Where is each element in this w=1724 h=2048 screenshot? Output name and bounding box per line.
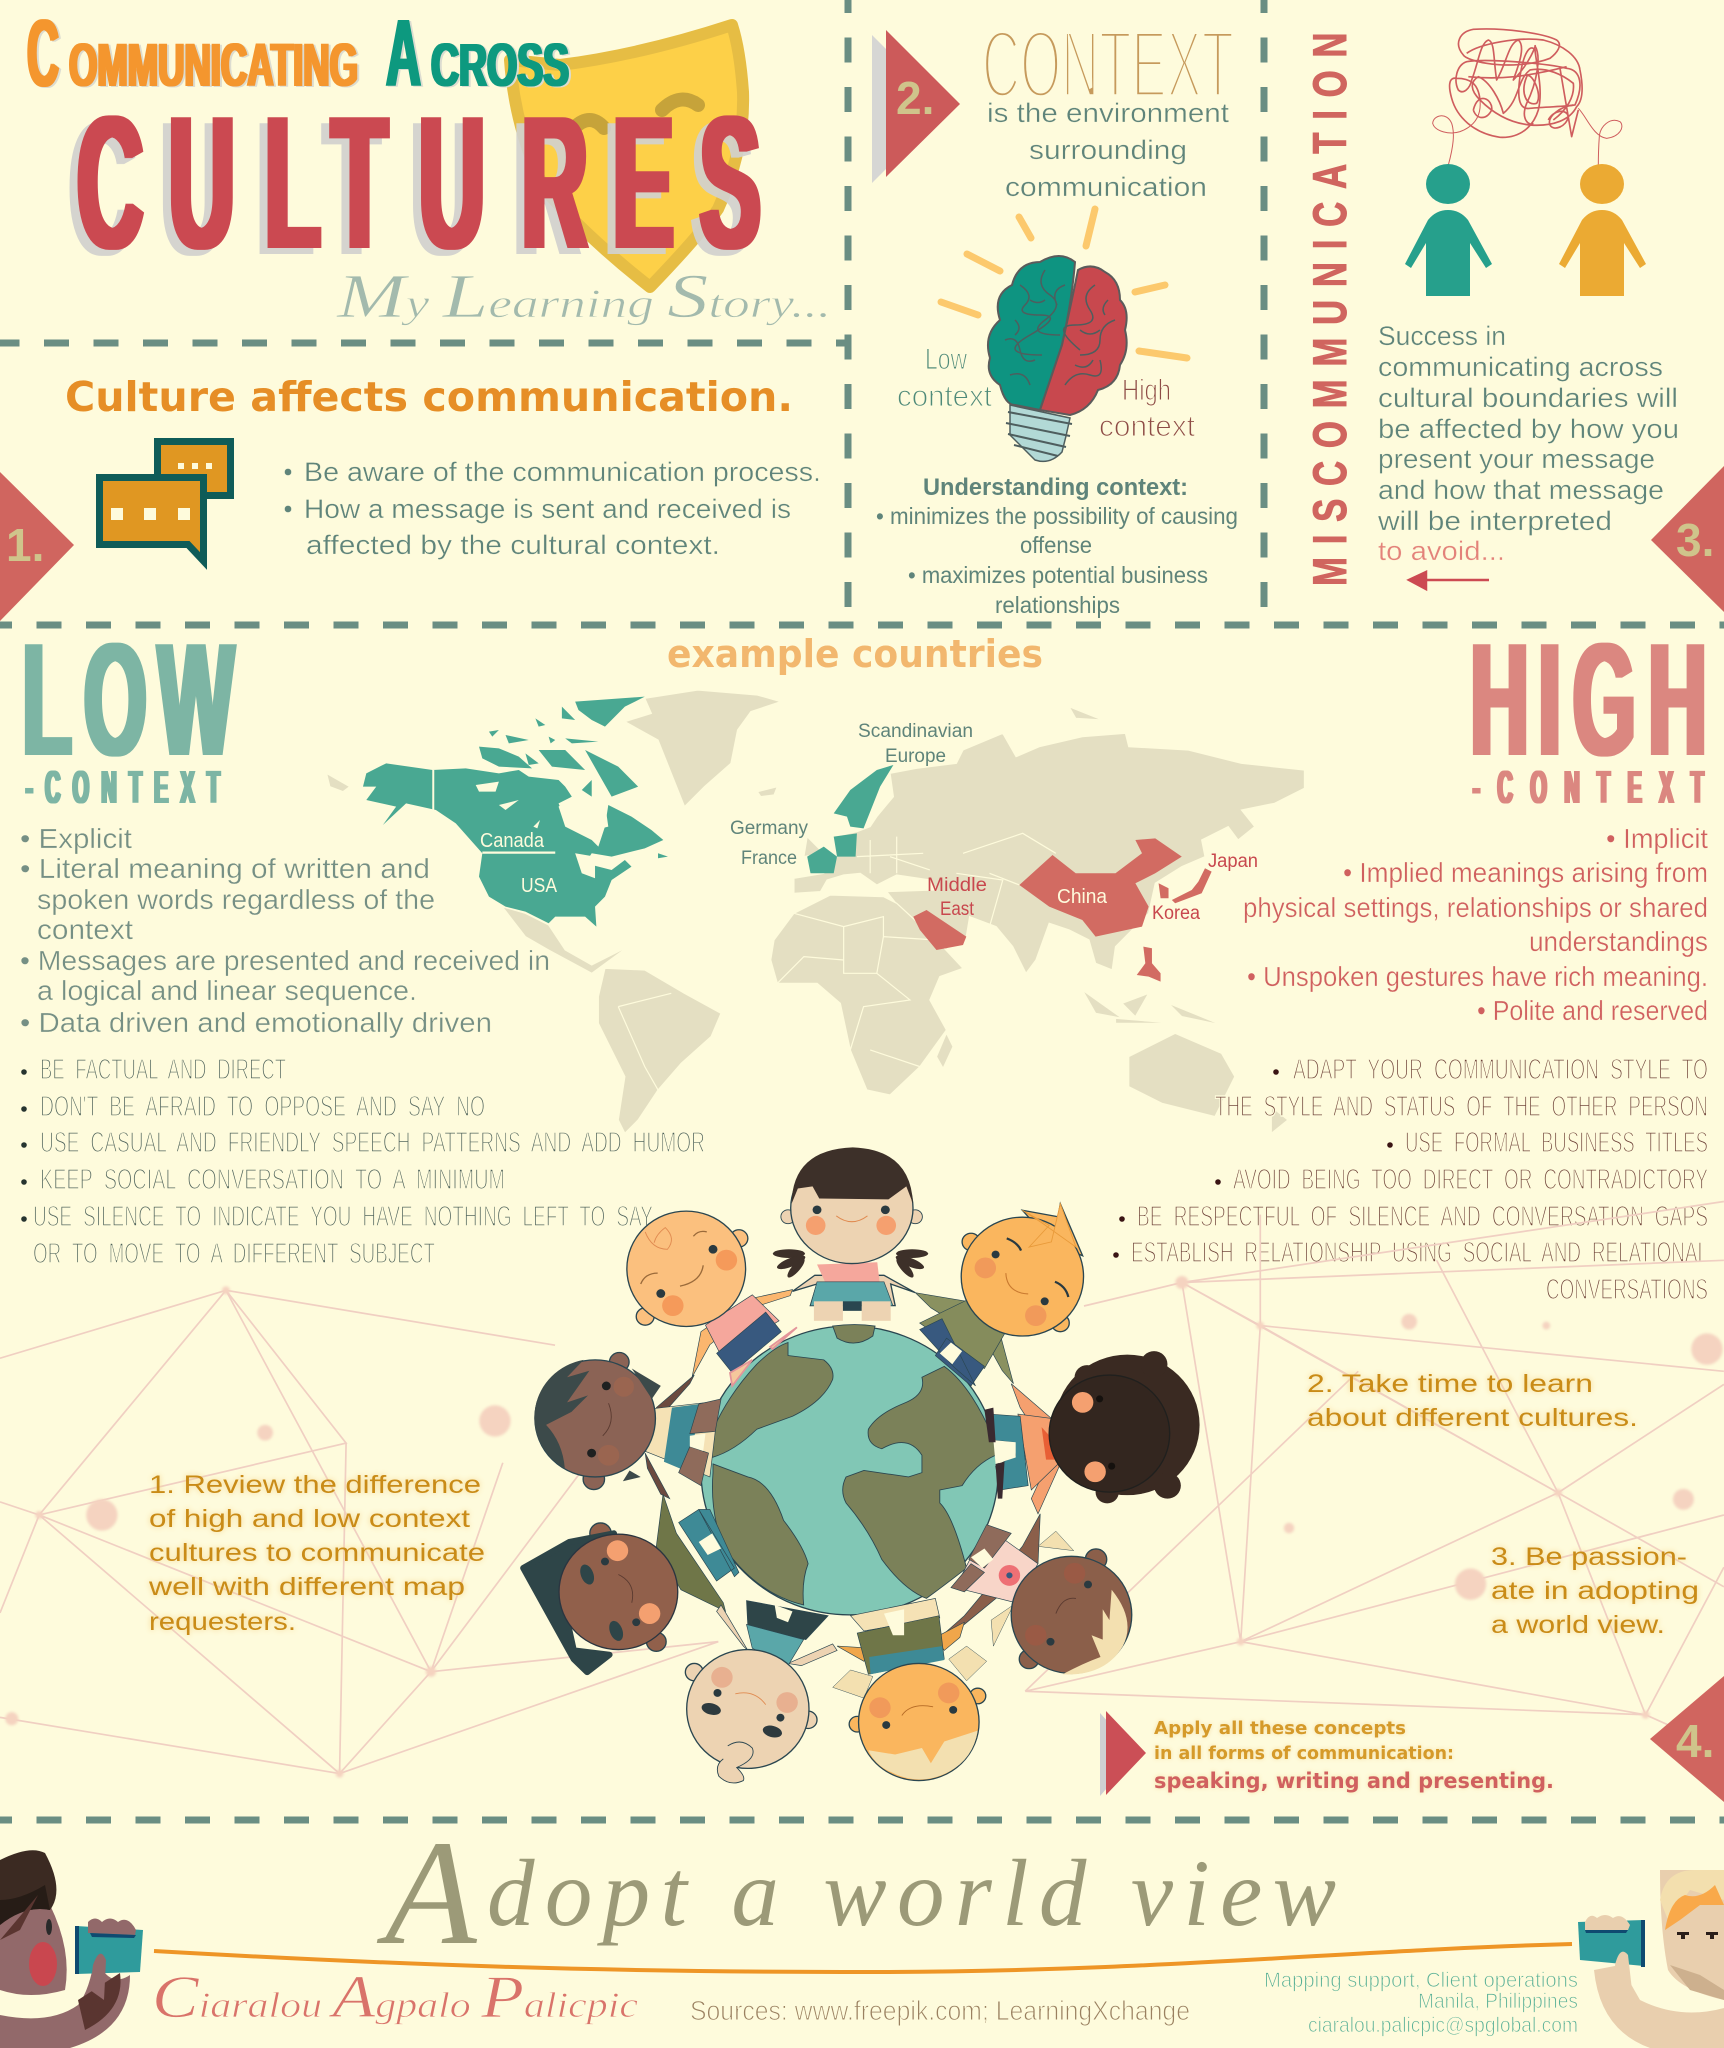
title: Cultures: CULTURES: [77, 76, 761, 289]
title: Communicating Across: A: [386, 0, 421, 107]
heading: Culture affects communication: Culture affects communication.: [65, 373, 793, 421]
text block: low context advice: KEEP SOCIAL CONVERSATION TO A MINIMUM: [40, 1164, 505, 1196]
arrow: pointing left: [1409, 572, 1489, 589]
text block: high context traits: [1243, 823, 1708, 1026]
text block: success across boundaries: be affected by how you: [1378, 414, 1679, 444]
text block: communication process bullets: Be aware of the communication process.: [304, 457, 821, 487]
text block: low context traits: • Data driven and emotionally driven: [20, 1007, 492, 1038]
text block: low context advice: OR TO MOVE TO A DIFFERENT SUBJECT: [33, 1238, 435, 1270]
icon: yellow person: [1559, 164, 1646, 296]
heading: Adopt a world view: dopt a world view: [487, 1840, 1336, 1946]
icon: chat bubbles: [100, 442, 230, 561]
text block: success across boundaries: Success in: [1378, 321, 1506, 351]
labels: map countries: East: [940, 899, 975, 920]
text block: step 1 review: of high and low context: [149, 1505, 470, 1533]
text block: low context traits: [20, 823, 550, 1038]
child: upper-left: [627, 1211, 797, 1386]
text block: low context traits: spoken words regardless of the: [37, 884, 435, 915]
heading: High context: -CONTEXT: [1473, 762, 1704, 813]
illustration: left person with can: [0, 1850, 143, 2048]
callout: apply all these concepts: speaking, writing and presenting.: [1154, 1769, 1554, 1793]
text: sources: Sources: www.freepik.com; LearningXchange: [690, 1995, 1190, 2026]
marker: number 2: 2.: [896, 72, 934, 124]
text block: low context traits: a logical and linear sequence.: [37, 975, 417, 1006]
world map: [327, 690, 1304, 1133]
callout: apply all these concepts: [1154, 1718, 1554, 1793]
text block: context definition: [987, 98, 1230, 202]
text block: contact details: Mapping support, Client operations: [1264, 1969, 1578, 1992]
labels: map countries: USA: [521, 875, 558, 897]
signature: author name: Ciaralou Agpalo Palicpic: [152, 1964, 638, 2030]
text block: step 2 learn: 2. Take time to learn: [1307, 1370, 1593, 1398]
text block: step 2 learn: [1307, 1370, 1638, 1432]
marker: number 2: [872, 30, 960, 183]
text block: low context advice: [21, 1054, 705, 1270]
labels: low and high context: context: [897, 380, 993, 413]
text block: low context traits: • Messages are presented and received in: [20, 945, 550, 976]
text block: contact details: ciaralou.palicpic@spglobal.com: [1308, 2014, 1578, 2037]
child: right: [984, 1351, 1200, 1514]
marker: number 4: [1650, 1676, 1724, 1802]
wire: tin can telephone: [154, 1944, 1572, 1972]
marker: number 3: [1651, 466, 1724, 612]
subtitle: My Learning Story: M y L earning S tory...: [336, 263, 831, 331]
icon: tangled communication scribble: [1433, 29, 1622, 167]
text block: low context traits: • Explicit: [20, 823, 132, 854]
text block: low context traits: context: [37, 914, 133, 945]
labels: low and high context: Low: [925, 343, 967, 376]
globe: [701, 1325, 998, 1615]
child: lower-left: [523, 1494, 748, 1672]
text block: success across boundaries: communicating across: [1378, 352, 1663, 382]
text block: step 1 review: cultures to communicate: [149, 1539, 485, 1567]
text block: understanding context: offense: [1020, 532, 1092, 558]
heading: Adopt a world view: A: [376, 1810, 478, 1976]
text block: step 1 review: requesters.: [149, 1608, 296, 1636]
text block: understanding context: Understanding context:: [923, 474, 1188, 501]
text block: communication process bullets: How a message is sent and received is: [304, 494, 791, 524]
text block: high context traits: • Implicit: [1606, 823, 1708, 854]
heading: Miscommunication vertical: MISCOMMUNICATION: [1304, 32, 1356, 586]
text block: step 1 review: [148, 1471, 485, 1636]
text block: contact details: Manila, Philippines: [1418, 1990, 1578, 2013]
text block: step 3 passion: ate in adopting: [1491, 1577, 1699, 1605]
labels: map countries: Middle: [927, 875, 987, 896]
text block: communication process bullets: affected by the cultural context.: [306, 530, 720, 560]
text block: low context traits: • Literal meaning of written and: [20, 853, 430, 884]
labels: map countries: [480, 721, 1258, 924]
text block: low context advice: USE CASUAL AND FRIENDLY SPEECH PATTERNS AND ADD HUMOR: [40, 1127, 705, 1159]
text block: success across boundaries: [1377, 321, 1679, 566]
child: lower-right: [940, 1514, 1132, 1674]
heading: Low context: LOW: [22, 610, 234, 789]
illustration: children around the globe: [523, 1147, 1200, 1783]
callout: apply all these concepts: Apply all these concepts: [1154, 1718, 1406, 1739]
labels: map countries: Canada: [480, 830, 545, 852]
text block: success across boundaries: and how that message: [1378, 475, 1664, 505]
text block: context definition: surrounding: [1029, 135, 1187, 165]
text block: low context advice: BE FACTUAL AND DIRECT: [40, 1054, 286, 1086]
heading: example countries: example countries: [667, 632, 1043, 676]
title: Communicating Across: [27, 0, 569, 107]
labels: low and high context: High: [1122, 374, 1171, 407]
text block: step 1 review: well with different map: [148, 1573, 465, 1601]
text block: contact details: [1264, 1969, 1578, 2037]
labels: low and high context: [897, 343, 1196, 443]
text block: context definition: is the environment: [987, 98, 1230, 128]
title: Cultures: CULTURES: [69, 82, 753, 295]
text block: context definition: communication: [1005, 172, 1207, 202]
icon: brain light bulb: [941, 209, 1187, 461]
labels: map countries: Japan: [1208, 851, 1258, 872]
heading: Context: CONTEXT: [982, 11, 1234, 118]
icon: teal person: [1405, 164, 1492, 296]
text block: high context traits: understandings: [1529, 926, 1708, 957]
text block: step 3 passion: 3. Be passion-: [1491, 1543, 1687, 1571]
text block: success across boundaries: will be interpreted: [1377, 506, 1612, 536]
text block: communication process bullets: [284, 457, 821, 560]
child: bottom-left: [685, 1601, 837, 1783]
child: bottom-right: [833, 1598, 987, 1781]
text block: understanding context: [876, 474, 1238, 618]
network background: [0, 1202, 1724, 1777]
text block: step 3 passion: a world view.: [1491, 1611, 1665, 1639]
text block: low context advice: DON'T BE AFRAID TO OPPOSE AND SAY NO: [40, 1091, 485, 1123]
text block: success across boundaries: to avoid...: [1378, 536, 1505, 566]
marker: number 4: 4.: [1676, 1715, 1714, 1767]
icon: yellow theatre mask: [510, 25, 743, 287]
labels: map countries: China: [1057, 886, 1108, 908]
labels: map countries: Korea: [1152, 903, 1200, 924]
text block: understanding context: relationships: [995, 592, 1120, 618]
text block: low context advice: USE SILENCE TO INDICATE YOU HAVE NOTHING LEFT TO SAY: [33, 1201, 653, 1233]
heading: High context: HIGH: [1470, 610, 1707, 789]
text block: success across boundaries: present your message: [1378, 444, 1655, 474]
text block: understanding context: • maximizes potential business: [908, 562, 1208, 588]
text block: step 2 learn: about different cultures.: [1307, 1404, 1638, 1432]
labels: map countries: Europe: [885, 746, 946, 767]
labels: map countries: Germany: [730, 818, 808, 839]
title: Communicating Across: CROSS: [431, 31, 569, 99]
callout: apply all these concepts: in all forms of communication:: [1154, 1743, 1454, 1764]
marker: number 1: [0, 472, 74, 621]
heading: Low context: -CONTEXT: [26, 762, 220, 813]
text block: success across boundaries: cultural boundaries will: [1378, 383, 1678, 413]
labels: map countries: Scandinavian: [858, 721, 973, 742]
illustration: right person with can: [1578, 1870, 1724, 2048]
labels: map countries: France: [741, 848, 797, 869]
title: Communicating Across: OMMUNICATING: [69, 31, 358, 99]
text block: high context advice: [1113, 1054, 1708, 1306]
marker: apply triangle: [1100, 1711, 1146, 1796]
labels: low and high context: context: [1099, 410, 1196, 443]
title: Communicating Across: C: [27, 0, 59, 107]
text block: step 3 passion: [1491, 1543, 1699, 1639]
text block: step 1 review: 1. Review the difference: [149, 1471, 481, 1499]
child: top girl: [773, 1147, 928, 1321]
marker: number 3: 3.: [1676, 514, 1714, 566]
child: upper-right: [915, 1204, 1084, 1386]
child: left: [534, 1352, 721, 1499]
text block: high context traits: • Implied meanings arising from: [1343, 857, 1708, 888]
marker: number 1: 1.: [6, 519, 44, 571]
text block: understanding context: • minimizes the possibility of causing: [876, 503, 1238, 529]
